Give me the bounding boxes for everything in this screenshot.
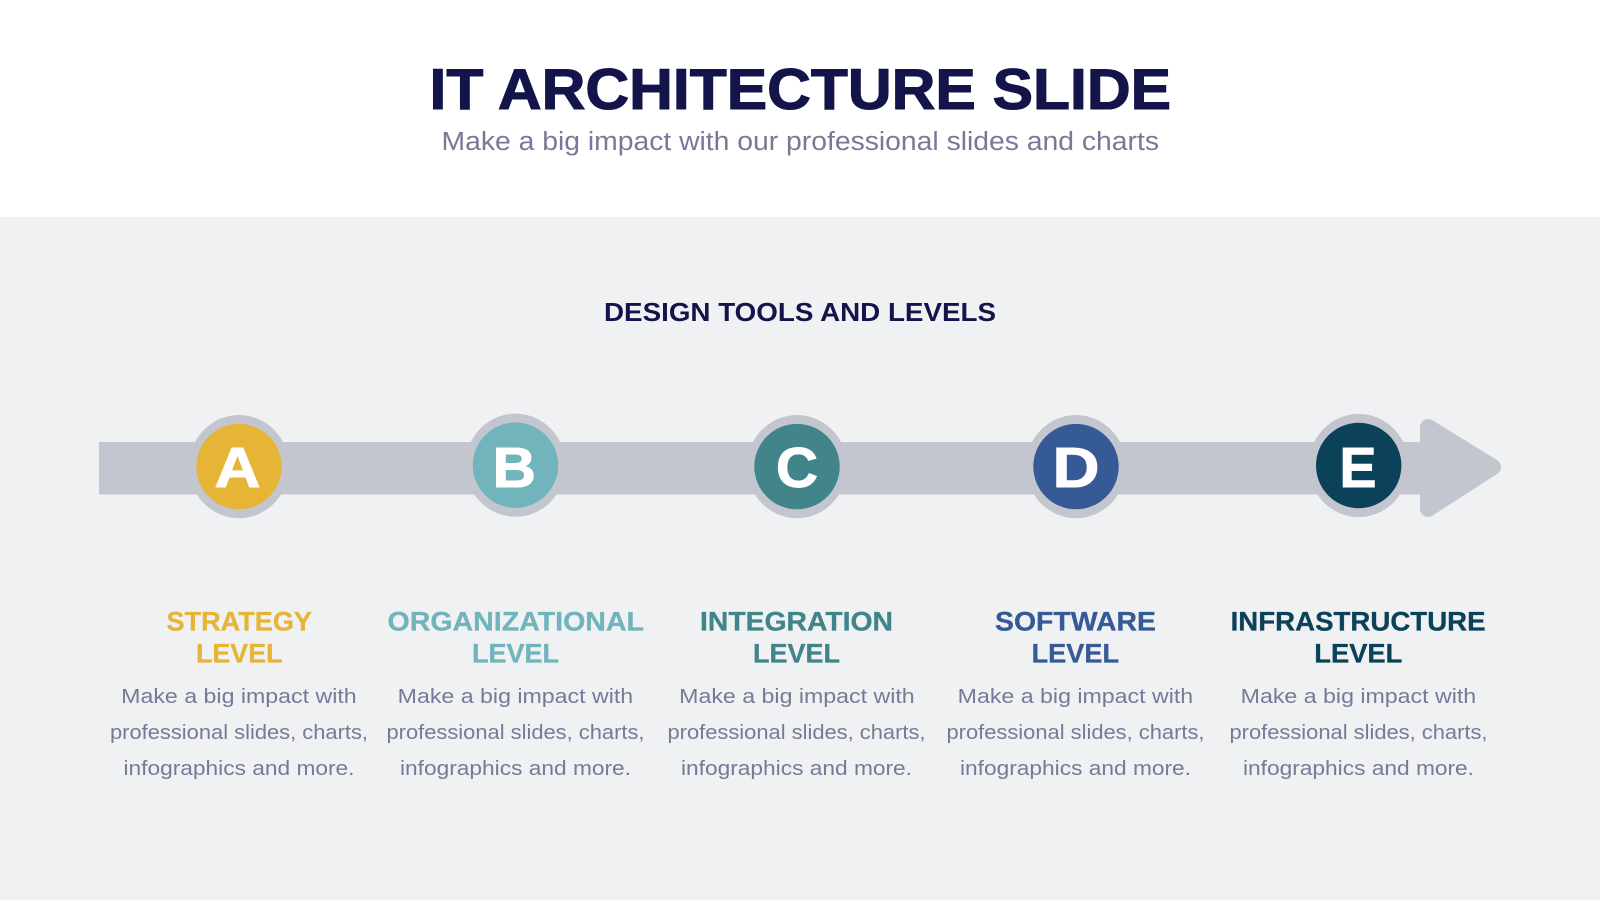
section heading: DESIGN TOOLS AND LEVELS [604,297,996,327]
icon: badge A: A [214,436,260,500]
icon: badge E [1309,414,1409,517]
icon: badge D: D [1052,436,1100,500]
column: organizational level [386,414,644,780]
column: strategy level [110,415,368,780]
text: strategy description: professional slides, charts, [110,721,368,744]
icon: badge E: E [1340,436,1376,500]
heading: infrastructure level: INFRASTRUCTURE [1231,607,1486,637]
text: integration description: Make a big impact with [679,685,915,708]
heading: organizational level [388,607,644,668]
icon: badge C: C [776,436,818,500]
heading: strategy level [166,607,312,668]
heading: infrastructure level: LEVEL [1314,638,1402,668]
heading: software level: SOFTWARE [995,607,1156,637]
heading: integration level: INTEGRATION [700,607,893,637]
column: integration level [668,415,926,780]
text: software description [946,685,1204,780]
text: infrastructure description: infographics and more. [1243,757,1474,780]
heading: strategy level: STRATEGY [166,607,312,637]
text: software description: professional slides, charts, [946,721,1204,744]
heading: software level [995,607,1156,668]
text: strategy description [110,685,368,780]
text: integration description: infographics and more. [681,757,912,780]
column: infrastructure level [1230,414,1488,780]
text: organizational description: Make a big impact with [398,685,633,708]
arrow: timeline [99,427,1493,509]
icon: badge B [466,414,566,517]
icon: badge A [189,415,289,518]
text: integration description: professional slides, charts, [668,721,926,744]
heading: organizational level: ORGANIZATIONAL [388,607,644,637]
text: infrastructure description: Make a big impact with [1241,685,1476,708]
heading: integration level: LEVEL [753,638,840,668]
heading: strategy level: LEVEL [196,638,282,668]
icon: badge D [1026,415,1126,518]
title: IT ARCHITECTURE SLIDE [430,58,1171,122]
icon: badge C [747,415,847,518]
text: infrastructure description: professional slides, charts, [1230,721,1488,744]
header background [0,0,1600,217]
text: strategy description: Make a big impact with [121,685,357,708]
text: organizational description: infographics and more. [400,757,631,780]
text: software description: infographics and more. [960,757,1191,780]
heading: infrastructure level [1231,607,1486,668]
text: strategy description: infographics and more. [124,757,354,780]
heading: organizational level: LEVEL [472,638,559,668]
heading: software level: LEVEL [1032,638,1119,668]
icon: badge B: B [492,436,536,500]
text: organizational description [386,685,644,780]
text: software description: Make a big impact with [958,685,1193,708]
text: organizational description: professional slides, charts, [386,721,644,744]
panel: design tools and levels [0,217,1600,900]
text: infrastructure description [1230,685,1488,780]
text: integration description [668,685,926,780]
subtitle: Make a big impact with our professional slides and charts [442,128,1159,156]
heading: integration level [700,607,893,668]
column: software level [946,415,1204,780]
